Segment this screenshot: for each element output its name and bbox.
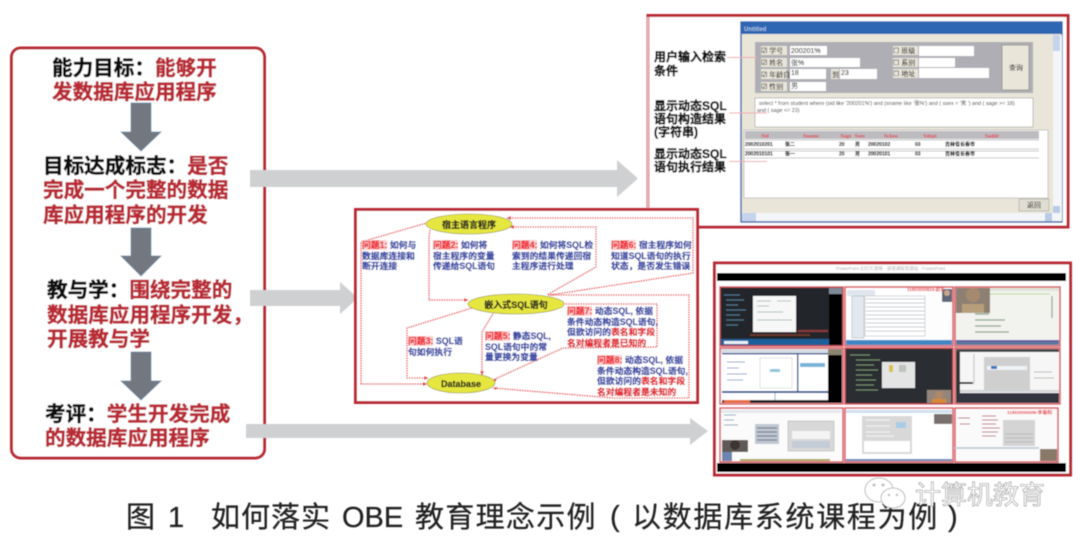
result table: 吉林省长春市 [945, 141, 975, 148]
question 7: 名对编程者是已知的 [567, 337, 646, 348]
question 3 [408, 335, 463, 357]
text block: achievement indicator: 库应用程序的开发 [43, 203, 208, 227]
search form: 23 [841, 70, 849, 77]
search form: 18 [791, 70, 799, 77]
figure caption: OBE [342, 502, 403, 534]
text block: teaching and learning [47, 278, 253, 351]
question 4 [512, 239, 593, 271]
search form [755, 42, 1033, 93]
connectors: dotted [361, 216, 693, 398]
question 8: 但欲访问的表名和字段 [597, 375, 685, 386]
title text: PowerPoint 幻灯片放映 - 讲培课程资源站 - PowerPoint [836, 265, 946, 272]
title bar: Untitled [744, 27, 767, 33]
screen 4 [720, 348, 843, 404]
question 7: 但欲访问的表名和字段 [567, 326, 655, 337]
node: host language program [426, 214, 512, 234]
result table: 男 [855, 142, 860, 148]
question 5: 量更换为变量 [485, 351, 538, 362]
result table: 20020102 [868, 142, 890, 148]
result table: Sclass [884, 134, 898, 140]
node: embedded SQL [468, 294, 564, 314]
node: database [427, 373, 495, 393]
screen 3 [955, 287, 1060, 346]
result table: 03 [915, 152, 921, 158]
question 5 [485, 330, 551, 362]
result table [744, 130, 1048, 198]
text block: achievement indicator [43, 154, 229, 227]
scrollbars [742, 35, 1062, 221]
screen 9 [955, 408, 1058, 462]
question 5: 问题5: 静态SQL, [485, 330, 551, 341]
labels: screenshot annotations: 条件 [654, 63, 678, 78]
result table: 张二 [785, 141, 795, 148]
panel border [12, 48, 264, 458]
window: query form [741, 22, 1062, 222]
panel: embedded SQL concept diagram [356, 210, 698, 402]
back button [1019, 199, 1049, 211]
search form: ☑ 性别 [761, 82, 783, 91]
search form: ☑ 年龄自 [761, 70, 790, 79]
arrow: down 1 [121, 103, 161, 151]
panel: dynamic SQL query screenshot [648, 16, 1068, 227]
node: host language program: 宿主语言程序 [442, 219, 496, 230]
black bars [717, 273, 1066, 472]
search form: ☐ 地址 [893, 69, 915, 78]
question 6: 问题6: 宿主程序如何 [611, 239, 692, 250]
search form: ☑ 姓名 [761, 58, 783, 67]
question 2: 宿主程序的变量 [433, 250, 495, 261]
callout lines [727, 58, 767, 162]
arrow: down 3 [121, 352, 161, 400]
SQL string output: and ( sage <= 23) [757, 108, 800, 114]
question 3: 问题3: SQL语 [408, 335, 463, 346]
question 8 [597, 354, 688, 397]
text block: ability goal: 发数据库应用程序 [52, 80, 217, 104]
question 7: 条件动态构造SQL语句, [567, 316, 658, 327]
result table: Sid [761, 134, 769, 140]
panel: OBE process flow [12, 48, 264, 458]
figure caption: ( [610, 501, 620, 533]
arrow: to query screenshot [250, 160, 638, 197]
labels: screenshot annotations: 语句执行结果 [654, 159, 726, 174]
panel border [356, 210, 698, 402]
question 6 [611, 239, 692, 271]
result table: 20020101 [868, 152, 890, 158]
search form: 200201% [791, 48, 821, 55]
text block: teaching and learning: 教与学：围绕完整的 [47, 278, 232, 302]
screen 2 [845, 286, 953, 346]
labels: screenshot annotations: 用户输入检索 [654, 49, 726, 64]
figure caption: ) [948, 501, 958, 533]
result table: 吉林省长春市 [945, 150, 975, 158]
panel border [648, 16, 1068, 227]
result table: 2002010101 [745, 152, 773, 158]
question 1: 断开连接 [362, 260, 397, 271]
screen 2: 11803000824-赵军 [907, 286, 945, 293]
arrow: to student work screenshots [246, 418, 708, 445]
result table: Sage [840, 134, 852, 140]
question 6: 知道SQL语句的执行 [611, 250, 691, 261]
search form: ☐ 班级 [893, 46, 915, 55]
search form: ☑ 学号 [761, 46, 783, 55]
labels: screenshot annotations: (字符串) [654, 124, 698, 139]
question 2 [433, 239, 495, 271]
result table: 20 [839, 152, 845, 158]
screen 8 [845, 408, 953, 462]
node: embedded SQL: 嵌入式SQL语句 [484, 299, 548, 310]
arrow: down 2 [121, 228, 161, 276]
question 1: 问题1: 如何与 [362, 239, 416, 250]
result table: 03 [915, 142, 921, 148]
question 8: 名对编程者是未知的 [597, 386, 676, 397]
result table: 男 [855, 152, 860, 158]
panel: student work screenshots [714, 263, 1070, 475]
text block: teaching and learning: 数据库应用程序开发， [47, 303, 253, 327]
text block: assessment: 考评：学生开发完成 [45, 402, 230, 426]
panel border [714, 263, 1070, 475]
question 7: 问题7: 动态SQL, 依据 [567, 305, 653, 316]
labels: screenshot annotations: 显示动态SQL [654, 146, 727, 161]
question 4: 主程序进行处理 [512, 260, 574, 271]
question 3: 句如何执行 [408, 346, 452, 357]
figure caption: 图 [126, 502, 155, 534]
text block: ability goal [52, 57, 217, 104]
figure caption: 1 [168, 502, 184, 534]
search form: ☐ 系别 [893, 58, 915, 67]
node: database: Database [441, 379, 481, 389]
result table: Sname [803, 134, 820, 140]
question 1 [362, 239, 416, 271]
watermark: WeChat account [865, 478, 1045, 510]
question 2: 问题2: 如何将 [433, 239, 487, 250]
SQL string output [755, 98, 1033, 127]
search form: 到 [832, 71, 839, 79]
text block: assessment: 的数据库应用程序 [45, 426, 210, 450]
result table: Sdept [923, 134, 937, 140]
SQL string output: select * from student where (sid like '200201%') and (sname like '张%') and ( ssex = '男 ') and ( sage >= 18) [759, 99, 1015, 107]
screen 5 [845, 348, 953, 404]
screen 1 [720, 287, 843, 346]
question 4: 索到的结果传递回宿 [512, 250, 591, 261]
figure caption: 如何落实 [211, 501, 331, 534]
result table: 张一 [785, 150, 795, 158]
title bar [741, 22, 1062, 34]
screen 6 [955, 348, 1060, 404]
search form: 查询 [1009, 63, 1023, 72]
question 2: 传递给SQL语句 [433, 260, 495, 271]
icon: chat bubbles [865, 478, 905, 508]
question 1: 数据库连接和 [362, 250, 415, 261]
result table: Ssex [855, 134, 865, 140]
text block: achievement indicator: 完成一个完整的数据 [43, 178, 228, 202]
watermark text: 计算机教育 [915, 480, 1045, 510]
question 8: 条件动态构造SQL语句, [597, 365, 688, 376]
labels: screenshot annotations: 语句构造结果 [654, 111, 726, 126]
figure caption: 以数据库系统课程为例 [632, 501, 939, 534]
labels: screenshot annotations: 显示动态SQL [654, 98, 727, 113]
question 8: 问题8: 动态SQL, 依据 [597, 354, 683, 365]
text block: ability goal: 能力目标：能够开 [52, 57, 217, 80]
search form: 张% [791, 58, 804, 67]
labels: screenshot annotations [654, 49, 727, 174]
text block: achievement indicator: 目标达成标志：是否 [43, 154, 229, 178]
text block: assessment [45, 402, 230, 450]
figure caption [126, 501, 958, 534]
screen 7 [720, 408, 843, 462]
text block: teaching and learning: 开展教与学 [47, 327, 150, 351]
question 7 [567, 305, 658, 348]
figure caption: 教育理念示例 [415, 501, 597, 534]
result table: 2002010201 [745, 142, 773, 148]
arrow: to embedded SQL diagram [250, 282, 358, 314]
screen 9: 11803000506-李春阳 [1007, 409, 1052, 416]
question 5: SQL语句中的常 [485, 341, 547, 352]
question 6: 状态，是否发生错误 [611, 260, 690, 271]
result table: Saddr [985, 134, 1000, 140]
question 4: 问题4: 如何将SQL检 [512, 239, 593, 250]
back button: 返回 [1027, 202, 1041, 210]
result table: 20 [839, 142, 845, 148]
search form: 男 [791, 82, 798, 90]
